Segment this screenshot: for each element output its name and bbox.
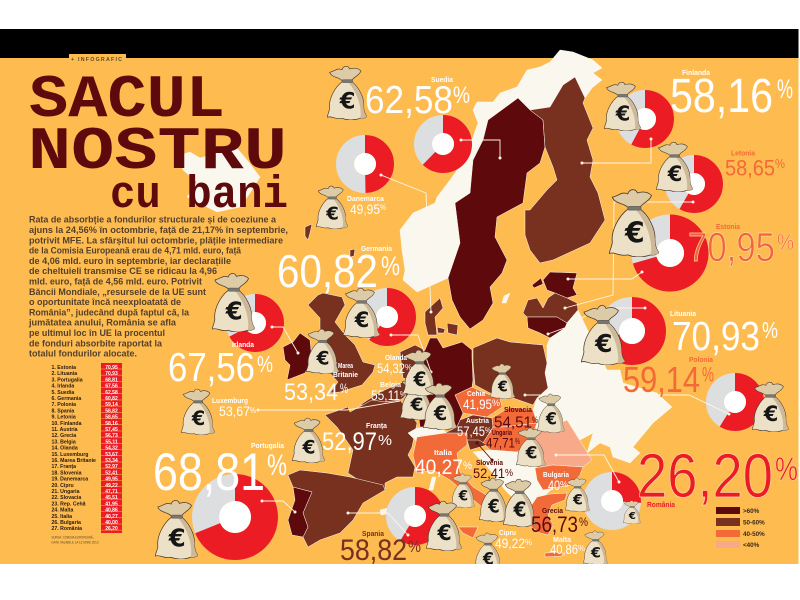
map: Lithuania [527,317,567,338]
leader line: Spania [346,512,410,536]
stat: Cehia: 41,95 [463,396,492,412]
intro paragraph: pe ultimul loc în UE la procentul [29,327,165,338]
leader line: Finlanda [580,138,652,164]
intro paragraph [28,214,288,359]
section tag: infografic [69,54,126,63]
map: Denmark [425,298,443,335]
ranking table: 10. Finlanda [52,421,82,427]
intro paragraph: România”, judecând după faptul că, la [29,306,190,317]
stat: Austria: Austria [466,416,490,425]
stat: Slovenia: Slovenia [476,458,504,467]
stat: Belgia: % [400,390,406,399]
stat: Slovacia: Slovacia [504,405,533,414]
icon: money bag Ungaria [516,428,546,467]
icon: money bag Luxemburg on map: € [433,402,447,425]
ranking table: 20. Cipru [52,483,74,489]
donut: Letonia [674,164,714,204]
leader line: Lituania [546,306,646,336]
donut: Spania [395,496,435,536]
stat: Germania: Germania [361,244,393,253]
ranking table: 17. Franța [52,464,76,470]
ranking table: 58,65 [105,415,118,421]
map: Spain [288,470,385,547]
ranking table: 54,32 [105,446,118,452]
icon: money bag Marea Britanie [306,329,339,374]
icon: money bag Danemarca: € [325,204,339,225]
stat: Irlanda: Irlanda [232,340,255,349]
map of Europe [180,50,672,557]
ranking table: 67,56 [105,384,118,390]
map: Latvia [523,293,578,323]
donut: Estonia [644,227,696,279]
icon: money bag Irlanda [212,273,255,332]
donut: Irlanda [235,303,275,343]
intro paragraph: de cheltuieli transmise CE se ridicau la 4,96 [29,265,217,276]
map: Estonia [543,272,577,298]
icon: money bag Bulgaria [565,478,590,512]
ranking table: 22. Slovacia [52,495,81,501]
table source note: SURSA: COMISIA EUROPEANĂ, [52,536,94,540]
ranking table: 45,51 [105,495,118,501]
map: Belgium [360,380,410,405]
map: Slovenia [467,440,487,450]
stat: Belgia: 55,11 [371,387,400,403]
stat: Slovenia [473,458,513,481]
ranking table: 8. Spania [52,408,74,414]
legend: >60% [743,508,760,515]
stat: Italia: % [463,460,472,472]
stat: Romania: 26,20 [637,442,773,511]
stat: Italia: 40,27 [415,456,463,479]
ranking table: 70,95 [105,365,118,371]
ranking table: 14. Olanda [52,446,78,452]
ranking table: 26,20 [105,526,118,532]
icon: money bag Italia: € [458,488,468,505]
ranking table: 57,45 [105,427,118,433]
title: cu bani [110,170,288,221]
icon: money bag Germania: € [354,308,369,332]
stat: Luxemburg: 53,67 [219,403,250,419]
ranking table: 49,95 [105,477,118,483]
stat: Marea Britanie: 53,34 [284,379,338,406]
leader line: Romania [554,454,620,484]
stat: Grecia: Grecia [542,506,564,515]
stat: Suedia: % [453,82,470,109]
leader line: Irlanda [270,326,300,354]
map: Switzerland [408,427,447,443]
map: Romania [527,420,592,468]
stat: Luxemburg: % [250,406,256,415]
ranking table: 58,16 [105,421,118,427]
stat: Slovenia: % [505,468,513,479]
stat: Cipru [495,528,532,551]
table source note: DATE VALABILE LA 13 IUNIE 2013 [52,540,99,544]
stat: Portugalia: % [267,449,287,482]
stat: Germania: % [381,251,400,281]
legend [716,507,765,549]
icon: money bag Letonia: € [667,162,682,186]
map: Norway [400,50,602,292]
icon: money bag Franta: € [302,437,316,458]
icon: money bag Olanda: € [413,369,427,391]
donut: Portugalia [206,488,264,546]
donut: Finlanda [625,99,665,139]
stat: Olanda [377,353,412,376]
ranking table: 59,14 [105,402,118,408]
stat: Spania: Spania [362,529,385,538]
stat: Suedia: Suedia [431,75,454,84]
map: Danish island Zealand [447,323,458,335]
map: Iceland [180,148,260,212]
map: Sardinia and Corsica [429,477,436,490]
leader line: Slovenia [476,442,494,462]
donut: Lituania [608,308,656,354]
ranking table: 5. Suedia [52,390,74,396]
intro paragraph: totalul fondurilor alocate. [29,348,137,359]
ranking table: 70,93 [105,371,118,377]
donut: Danemarca [345,144,385,184]
ranking table: 40,27 [105,514,118,520]
intro paragraph: mld. euro, față de 4,56 mld. euro. Potrivit [29,276,202,286]
stat: Cehia: Cehia [467,389,486,398]
ranking table: 15. Luxemburg [52,452,88,458]
ranking table: 53,34 [105,458,118,464]
stat: Olanda: 54,32 [377,360,405,376]
icon: money bag Germania [343,288,380,338]
stat: Bulgaria: Bulgaria [543,470,570,479]
donut: Romania [592,481,632,521]
ranking table: 18. Slovenia [52,470,82,476]
donut: Germania [367,297,407,337]
stat: Polonia: % [702,364,714,386]
ranking table: 52,97 [105,464,118,470]
ranking table: 52,41 [105,470,118,476]
map: Sweden [448,98,545,329]
stat: Luxemburg: Luxemburg [212,396,248,405]
icon: money bag Portugalia [155,500,198,559]
ranking table: 40,86 [105,508,118,514]
map: Faroe Islands [305,224,312,240]
leader line: Polonia [524,394,730,416]
stat: Irlanda: 67,56 [168,344,255,390]
ranking table: 13. Belgia [52,439,76,445]
map: Ireland [283,333,312,380]
ranking table [52,363,118,533]
stat: Marea Britanie [284,361,358,406]
stat: Malta: Malta [553,535,572,544]
map: Gotland [502,293,510,303]
stat: Olanda: % [405,363,412,372]
map: Austria [445,415,493,443]
ranking table: 24. Malta [52,508,74,514]
map: Czech Republic [455,387,502,417]
ranking table: 4. Irlanda [52,384,74,390]
stat: Letonia: Letonia [731,148,756,158]
icon: money bag Luxemburg [181,389,215,435]
title: SACUL [29,67,225,135]
map: Shetland [350,249,355,257]
stat: Suedia: 62,58 [365,79,453,122]
map: Germany [408,338,473,427]
black top band [0,29,798,59]
stat: Slovacia: 54,51 [494,414,532,432]
stat: Italia [415,448,472,479]
ranking table: 7. Polonia [52,402,76,408]
intro paragraph: jumătatea anului, România se afla [28,317,177,328]
stat: Franta: % [378,432,392,449]
icon: money bag Marea Britanie: € [316,348,330,369]
ranking table: 1. Estonia [52,365,76,371]
stat: Cehia [463,389,500,412]
icon: money bag Portugalia: € [168,523,186,552]
icon: money bag Grecia [503,479,536,527]
ranking table: 26. Bulgaria [52,520,81,526]
stat: Belgia [371,380,406,403]
icon: money bag Estonia: € [624,216,645,249]
stat: Portugalia: Portugalia [251,441,285,450]
stat: Irlanda: % [257,351,273,377]
map: Netherlands [400,345,425,380]
map: Finland [525,77,605,263]
icon: money bag Belgia: € [410,395,424,416]
map: Poland [473,338,548,405]
stat: Danemarca: 49,95 [350,201,380,217]
ranking table: 27. România [52,526,82,532]
ranking table: 41,95 [105,501,118,507]
map: Saaremaa [532,278,543,288]
ranking table: 25. Italia [52,514,72,520]
icon: money bag Belgia [400,377,433,420]
icon: money bag Slovacia: € [545,409,557,429]
stat: Romania: România [647,500,676,509]
ranking table: 56,73 [105,433,118,439]
icon: money bag Polonia on map: € [497,379,508,395]
stat: Cipru: Cipru [499,528,516,537]
icon: money bag Polonia on map [490,364,515,399]
map: Hungary [483,423,537,452]
icon: money bag Spania: € [437,521,452,545]
stat: Portugalia: 68,81 [153,443,265,502]
stat: Danemarca: Danemarca [347,194,385,203]
ranking table: 23. Rep. Cehă [52,501,86,507]
icon: money bag Bulgaria: € [572,492,583,509]
stat: Marea Britanie: Britanie [333,370,358,379]
stat: Marea Britanie: % [340,380,348,396]
leader line: Estonia [566,270,644,280]
stat: Grecia: 56,73 [531,512,578,537]
stat: Bulgaria: % [560,480,568,489]
stat: Marea Britanie: Marea [338,361,354,370]
icon: money bag Luxemburg: € [191,407,205,430]
ranking table: 12. Grecia [52,433,76,439]
stat: Danemarca [347,194,386,217]
ranking table: 58,82 [105,408,118,414]
map: France [325,400,417,490]
stat: Finlanda: 58,16 [670,70,773,123]
stat: Ungaria: Ungaria [492,428,513,437]
donut: Polonia [715,382,755,422]
stat: Austria: % [485,426,491,435]
ranking table: 47,71 [105,489,118,495]
map: Balkans [473,450,553,505]
intro paragraph: de fonduri absorbite raportat la [29,337,163,348]
stat: Slovacia: % [532,415,538,425]
stat: Austria [457,416,491,439]
stat: Finlanda: Finlanda [682,68,711,77]
ranking table: 2. Lituania [52,371,77,377]
icon: money bag Ungaria: € [525,443,537,462]
stat: Malta: % [578,544,585,553]
stat: Franta: 52,97 [322,428,377,456]
stat: Spania: % [408,537,421,556]
stat: Slovacia [494,405,538,432]
ranking table: 55,11 [105,439,118,445]
icon: money bag Slovenia [479,478,508,522]
stat: Grecia: % [579,515,588,529]
map: Belarus, Ukraine, Moldova [533,310,672,463]
ranking table: 11. Austria [52,427,78,433]
icon: money bag Spania [426,501,462,551]
title [28,67,288,221]
donut: Suedia [423,124,463,164]
legend: 50-60% [743,520,765,526]
icon: money bag Cipru: € [482,549,494,569]
stat: Bulgaria: 40 [548,477,560,493]
icon: money bag Irlanda: € [225,296,243,325]
icon: money bag Suedia [327,66,367,120]
ranking table: 6. Germania [52,396,81,402]
ranking table: 9. Letonia [52,415,76,421]
stat: Bulgaria [543,470,570,493]
stat: Danemarca: % [380,203,386,212]
title: NOSTRU [28,119,287,187]
stat: Cehia: % [492,398,500,408]
icon: money bag Danemarca [316,186,348,229]
section tag: infografic: + INFOGRAFIC [71,57,122,63]
stat: Cipru: 49,22 [495,535,525,551]
legend: 40-50% [743,531,765,538]
icon: money bag Polonia: € [763,402,778,426]
intro paragraph: ajuns la 24,56% în octombrie, față de 21,17% în septembrie, [29,224,288,235]
stat: Olanda: Olanda [385,353,408,362]
stat: Estonia: % [777,229,794,255]
icon: money bag Suedia: € [339,88,356,114]
icon: money bag Franta [292,418,325,463]
stat: Luxemburg [212,396,256,419]
icon: money bag Polonia [752,382,789,432]
stat: Estonia: Estonia [716,222,741,231]
icon: money bag Luxemburg on map [423,383,457,430]
intro paragraph: Băncii Mondiale, „resursele de la UE sunt [29,286,206,297]
leader line: Letonia [564,200,694,310]
stat: Polonia: Polonia [689,355,714,364]
icon: money bag Romania: € [628,511,636,522]
stat: Austria: 57,45 [457,423,485,439]
ranking table: 19. Danemarca [52,477,88,483]
ranking table: 62,58 [105,390,118,396]
stat: Malta: 40,86 [550,541,578,557]
stat: Letonia: % [775,156,785,171]
stat: Polonia: 59,14 [623,359,700,400]
map: Greece [525,493,567,535]
intro paragraph: Rata de absorbție a fondurilor structurale și de coeziune a [29,214,277,225]
icon: money bag Italia [451,474,475,508]
map: Italy [413,433,497,507]
map: Crete [545,552,562,557]
leader line: Portugalia [260,500,296,514]
stat: Cipru: % [525,538,532,547]
stat: Lituania: 70,93 [672,313,760,359]
map: Danish island Fyn [437,327,445,333]
ranking table: 21. Ungaria [52,489,80,495]
icon: money bag Finlanda: € [615,102,630,125]
map: Portugal [288,487,312,537]
stat: Belgia: Belgia [380,380,402,389]
icon: money bag Finlanda [604,82,641,131]
intro paragraph: o oportunitate încă neexploatată de [29,296,181,307]
stat: Ungaria: % [515,437,520,446]
leader line: Danemarca [380,174,432,314]
intro paragraph: de la Comisia Europeană erau de 4,71 mld. euro, față [29,245,242,256]
stat: Spania: 58,82 [340,534,407,567]
stat: Estonia: 70,95 [688,224,775,270]
ranking table: 16. Marea Britanie [52,458,96,464]
icon: money bag Lituania: € [594,329,612,358]
map: Slovakia [492,407,537,427]
stat: Ungaria [486,428,520,450]
ranking table: 3. Portugalia [52,377,83,383]
icon: money bag Slovenia: € [487,497,500,518]
icon: money bag Malta: € [590,545,601,562]
ranking table: 68,81 [105,377,118,383]
ranking table: 53,67 [105,452,118,458]
icon: money bag Estonia [609,190,659,257]
stat: Lituania: Lituania [670,309,697,318]
intro paragraph: potrivit MFE. La sfârșitul lui octombrie, plățile intermediare [29,234,283,245]
ranking table: 49,22 [105,483,118,489]
leader line: Luxemburg [256,401,400,412]
table source note [52,536,99,544]
stat: Slovenia: 52,41 [473,465,505,481]
stat: Ungaria: 47,71 [486,434,515,450]
leader line: Germania [390,334,432,374]
icon: money bag Malta [583,531,608,565]
stat: Germania: 60,82 [277,245,378,297]
icon: money bag Olanda [403,350,436,396]
map: Bulgaria [535,465,583,490]
stat: Lituania: % [762,317,778,343]
legend: <40% [743,542,760,549]
icon: money bag Letonia [656,142,693,192]
stat: Italia: Italia [434,448,453,457]
map: Sicily [458,527,478,538]
icon: money bag Slovacia [537,394,565,433]
icon: money bag Lituania [581,305,625,365]
icon: money bag Romania [623,501,641,524]
leader line: Suedia [460,138,502,160]
map: Great Britain [308,293,375,393]
stat: Franta: Franța [366,421,388,430]
stat: Letonia: 58,65 [725,156,775,180]
map: Balearic Islands [380,508,388,515]
ranking table: 40,00 [105,520,118,526]
icon: money bag Grecia: € [513,498,527,522]
icon: money bag Cipru [474,533,502,573]
intro paragraph: de 4,06 mld. euro în septembrie, iar declarațiile [29,255,231,266]
ranking table: 60,82 [105,396,118,402]
